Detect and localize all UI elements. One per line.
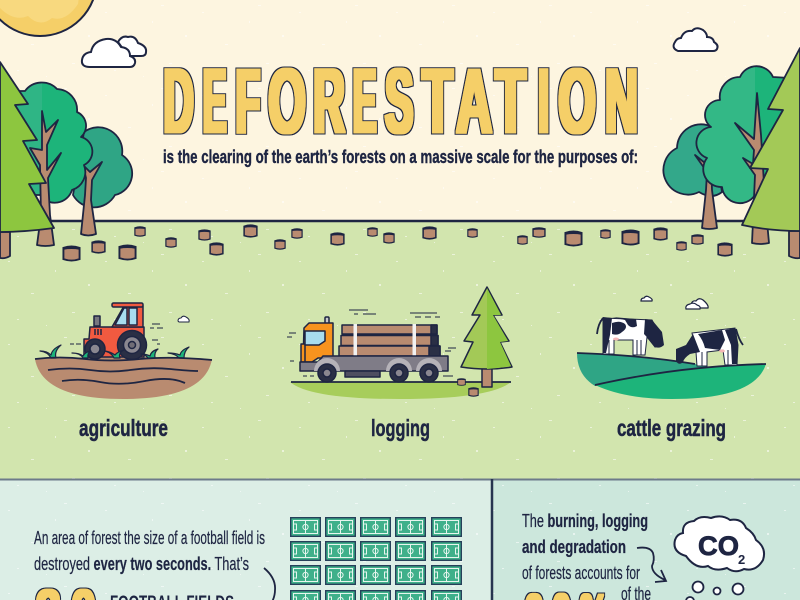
icon: right cloud [674, 28, 718, 51]
icon: left back tree [73, 127, 132, 236]
arrow: bracket to fields [264, 568, 275, 600]
title: O [268, 50, 306, 152]
icon: left front tree [0, 83, 92, 246]
front hill [595, 364, 766, 399]
stumps on cleared ground [63, 225, 732, 261]
icon: right pine tree [742, 48, 800, 258]
icon: CO2 thought cloud: CO [698, 531, 739, 561]
tractor [84, 303, 146, 360]
illustration: logging [287, 287, 512, 399]
text: football field statement: An area of forest the size of a football field is [34, 528, 265, 548]
label: logging: logging [371, 415, 430, 441]
panel: football fields background [0, 479, 492, 600]
right cow [676, 328, 743, 366]
soil mound [35, 357, 212, 399]
crop sprouts [40, 345, 189, 358]
icon: sun [0, 0, 97, 36]
text: football field statement [34, 528, 265, 574]
felled stumps [458, 379, 478, 396]
text: burning statement [522, 510, 648, 583]
text: football field statement: destroyed every two seconds. That’s [34, 554, 249, 574]
title: T [495, 50, 526, 152]
text: N [605, 50, 638, 152]
icon: CO2 thought cloud [674, 516, 764, 571]
football field grid [291, 518, 461, 600]
pine tree [461, 287, 512, 387]
icon: CO2 thought cloud: 2 [738, 552, 745, 567]
text: burning statement: The burning, logging [522, 510, 648, 531]
title: S [385, 50, 413, 152]
title: I [538, 50, 549, 152]
illustration: cattle grazing [577, 296, 766, 399]
title: F [236, 50, 260, 152]
icon: thought bubbles [686, 582, 744, 600]
left cow [597, 317, 664, 355]
title: O [558, 50, 596, 152]
subtitle: is the clearing of the earth’s forests on a massive scale for the purposes of: [163, 147, 638, 167]
illustration: agriculture [35, 303, 212, 399]
title: E [353, 50, 376, 152]
icon: right back tree [663, 124, 722, 229]
title: D [164, 50, 194, 152]
title: E [203, 50, 226, 152]
panel: green ground [0, 221, 800, 479]
title: A [456, 50, 492, 152]
arrow: to CO2 cloud [637, 548, 666, 582]
grass ellipse [290, 382, 511, 399]
icon: left clouds [82, 37, 146, 67]
motion lines [287, 310, 456, 376]
logging truck [300, 317, 448, 382]
label: cattle grazing: cattle grazing [617, 415, 726, 441]
title: T [422, 50, 453, 152]
panel: carbon emissions background [492, 479, 800, 600]
text: burning statement: of forests accounts for [522, 563, 640, 583]
small clouds [641, 296, 708, 309]
back hill [577, 353, 740, 386]
small cloud and motion lines [178, 316, 189, 322]
panel: sky background [0, 0, 800, 222]
title: R [313, 50, 345, 152]
icon: left pine tree [0, 62, 54, 258]
icon: right front tree [696, 66, 790, 244]
text: burning statement: and degradation [522, 536, 626, 557]
label: agriculture: agriculture [79, 415, 168, 441]
soil surface and furrows [35, 358, 212, 384]
